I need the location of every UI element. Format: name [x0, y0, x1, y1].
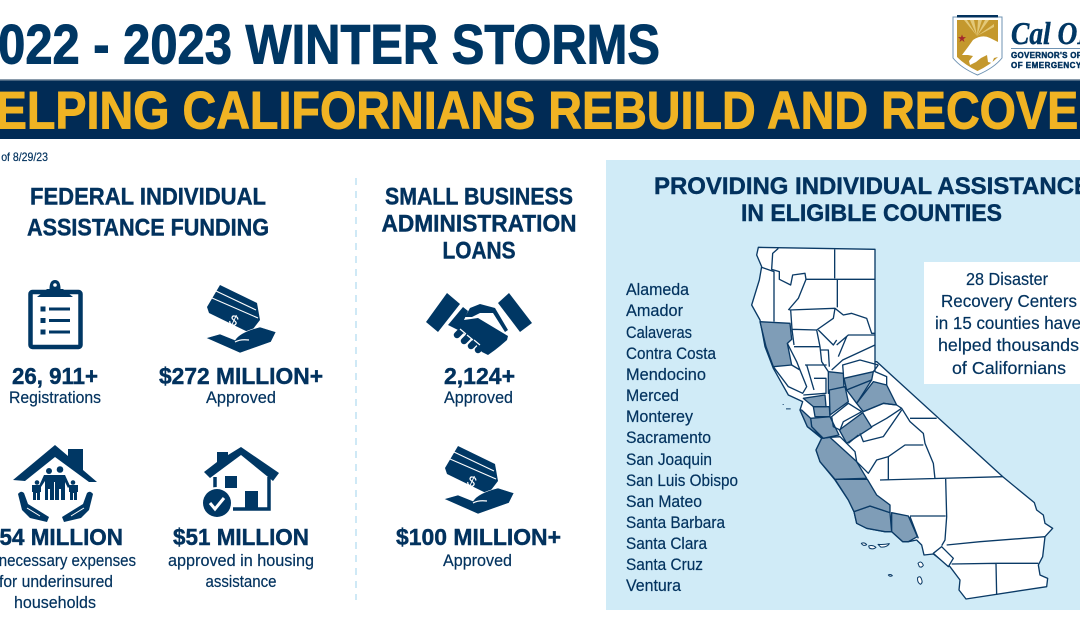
callout: disaster recovery centers: 28 Disaster — [966, 269, 1048, 289]
icon: clipboard — [30, 280, 80, 347]
heading: sba loans: SMALL BUSINESS — [385, 184, 573, 210]
stat: 51 million: approved in housing — [168, 551, 314, 570]
icon: handshake — [426, 293, 532, 355]
stat: 51 million: $51 MILLION — [173, 524, 309, 550]
stat: 2,124 approved — [444, 363, 515, 407]
county list: Sacramento — [626, 428, 711, 447]
stat: 2,124 approved: Approved — [444, 388, 513, 407]
county list: San Joaquin — [626, 450, 712, 469]
heading: federal assistance — [27, 184, 269, 242]
heading: federal assistance: FEDERAL INDIVIDUAL — [30, 184, 266, 210]
county list: Monterey — [626, 407, 693, 426]
county list: Santa Barbara — [626, 513, 725, 532]
icon: family in house with hands — [13, 445, 97, 522]
callout: disaster recovery centers: helped thousands — [938, 335, 1079, 355]
stat: 51 million — [168, 524, 314, 591]
panel heading: PROVIDING INDIVIDUAL ASSISTANCE — [654, 173, 1080, 200]
heading: sba loans — [382, 184, 576, 264]
stat: 272 million: Approved — [206, 388, 276, 407]
county list: Santa Cruz — [626, 555, 703, 574]
stat: 272 million — [159, 363, 323, 407]
heading: federal assistance: ASSISTANCE FUNDING — [27, 214, 269, 242]
county list: Amador — [626, 301, 683, 320]
stat: 100 million approved: Approved — [443, 551, 512, 570]
stat: 51 million: assistance — [206, 572, 276, 591]
county list: Santa Clara — [626, 534, 707, 553]
callout: disaster recovery centers: Recovery Centers — [941, 291, 1077, 311]
stat: 54 million — [0, 524, 136, 612]
stat: 100 million approved: $100 MILLION+ — [396, 524, 561, 550]
icon: money in hand small business: $ — [464, 473, 480, 492]
county list: Calaveras — [626, 323, 692, 342]
stat: 54 million: households — [14, 593, 96, 612]
stat: registrations — [9, 363, 101, 407]
county list: Alameda — [626, 280, 689, 299]
panel heading: IN ELIGIBLE COUNTIES — [741, 200, 1002, 227]
county list: Merced — [626, 386, 679, 405]
panel: eligible counties — [606, 160, 1080, 610]
icon: money in hand: $ — [226, 312, 242, 331]
county list: Mendocino — [626, 365, 706, 384]
stat: 54 million: for underinsured — [0, 572, 113, 591]
logo — [953, 15, 1080, 75]
panel heading — [654, 173, 1080, 227]
stat: 100 million approved — [396, 524, 561, 570]
stat: 2,124 approved: 2,124+ — [444, 363, 515, 389]
county list: San Mateo — [626, 492, 702, 511]
stat: registrations: Registrations — [9, 388, 101, 407]
heading: sba loans: ADMINISTRATION — [382, 210, 576, 238]
callout: disaster recovery centers — [924, 262, 1080, 384]
icon: money in hand — [206, 285, 276, 353]
county list — [626, 280, 738, 595]
stat: registrations: 26, 911+ — [12, 363, 98, 389]
shield — [953, 15, 1002, 75]
banner — [0, 79, 1080, 140]
heading: sba loans: LOANS — [442, 238, 516, 264]
stat: 272 million: $272 MILLION+ — [159, 363, 323, 389]
icon: house with checkmark — [201, 447, 279, 519]
icon: money in hand small business — [444, 446, 514, 514]
county list: Contra Costa — [626, 344, 716, 363]
county list: San Luis Obispo — [626, 471, 738, 490]
divider — [355, 178, 357, 600]
county list: Ventura — [626, 576, 682, 595]
california map — [752, 247, 1053, 599]
callout: disaster recovery centers: of Californians — [952, 358, 1066, 378]
